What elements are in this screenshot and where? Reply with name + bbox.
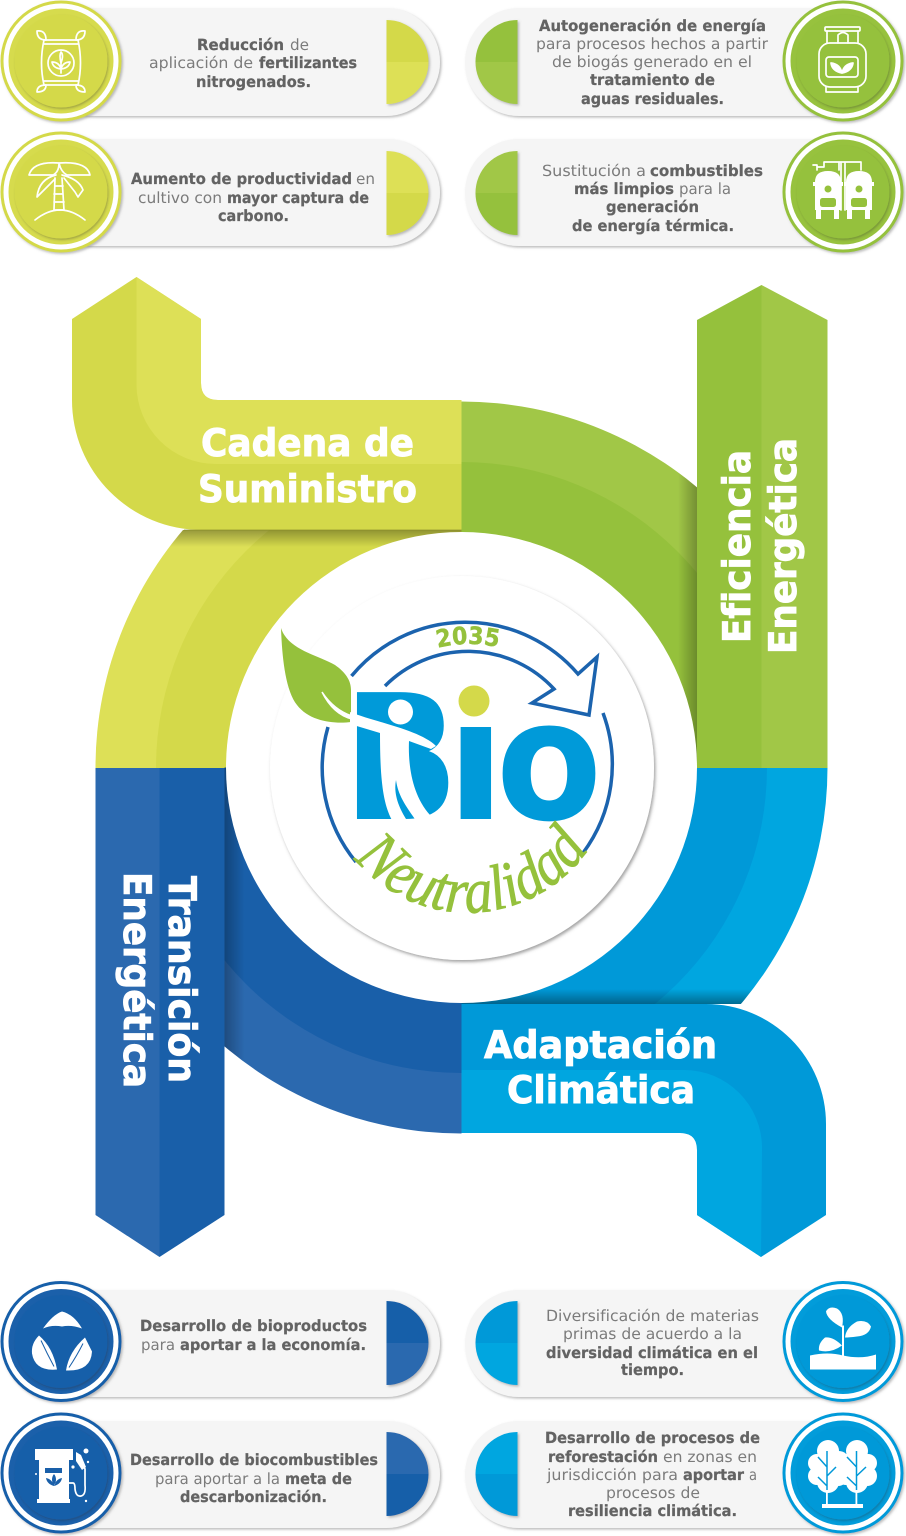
arrow: Eficiencia Energética: [697, 285, 828, 768]
arc segment: climate adaptation quadrant: [462, 768, 828, 1004]
panel: aumento de productividad: [2, 133, 440, 251]
logo: Bio wordmark: B: [343, 658, 459, 861]
badge with leaves icon: [2, 1282, 120, 1400]
logo: leaf: [281, 628, 352, 723]
central white disc: [226, 532, 697, 1003]
text block: Diversificación de materias: [546, 1307, 759, 1325]
text block: Desarrollo de biocombustibles: [130, 1451, 378, 1469]
arrow: Transición Energética: Transición: [160, 876, 204, 1083]
text block: para aportar a la: [155, 1470, 280, 1488]
logo: circular arrow ring: [322, 622, 612, 862]
text block: [542, 162, 763, 235]
badge with palm icon: [2, 133, 120, 251]
icon: fuel pump: [35, 1448, 89, 1503]
panel: desarrollo de biocombustibles: [2, 1414, 440, 1532]
half disc: [386, 1301, 428, 1385]
text block: más limpios: [574, 180, 674, 198]
text block: nitrogenados.: [196, 73, 311, 91]
arrow: Transición Energética: Energética: [115, 872, 159, 1088]
text block: generación: [606, 198, 699, 216]
arrow: Adaptación Climática: Adaptación: [484, 1023, 717, 1067]
text block: resiliencia climática.: [568, 1502, 737, 1520]
text block: cultivo con: [138, 189, 222, 207]
arrow: Eficiencia Energética: Eficiencia: [715, 450, 759, 643]
logo: Bio wordmark: i: [446, 658, 506, 861]
text block: a: [749, 1466, 757, 1484]
text block: fertilizantes: [259, 54, 357, 72]
half disc: [476, 1301, 518, 1385]
icon: three leaves: [32, 1312, 92, 1371]
text block: aplicación de: [149, 54, 253, 72]
text block: [536, 17, 769, 108]
half disc: [476, 20, 518, 104]
badge with boiler icon: [784, 133, 902, 251]
text block: [149, 36, 357, 91]
badge with sprout icon: [784, 1282, 902, 1400]
text block: aportar: [683, 1466, 744, 1484]
arrow: Transición Energética: [96, 768, 224, 1257]
half disc: [386, 1432, 428, 1516]
badge with trees icon: [784, 1414, 902, 1532]
arc segment: energy efficiency quadrant: [462, 402, 697, 765]
logo: Neutralidad script: Neutralidad: [352, 820, 588, 914]
panel: desarrollo de bioproductos: [2, 1282, 440, 1400]
text block: Autogeneración de energía: [539, 17, 766, 35]
half disc: [386, 151, 428, 235]
arrow: Cadena de Suministro: [72, 277, 462, 531]
text block: [546, 1307, 759, 1379]
panel: diversificación de materias primas: [465, 1282, 902, 1400]
panel: sustitución a combustibles: [465, 133, 902, 251]
text block: reforestación: [548, 1448, 658, 1466]
text block: [140, 1317, 367, 1354]
badge with sack icon: [2, 2, 120, 120]
text block: descarbonización.: [180, 1488, 327, 1506]
logo: Bio wordmark: o: [496, 665, 602, 859]
panel: autogeneración de energía: [465, 2, 902, 120]
text block: Reducción: [197, 36, 284, 54]
text block: para procesos hechos a partir: [536, 35, 769, 53]
half disc: [386, 20, 428, 104]
icon: fertilizer sack: [37, 31, 85, 92]
arc segment: supply chain quadrant: [96, 530, 462, 768]
text block: aguas residuales.: [581, 90, 724, 108]
text block: Sustitución a: [542, 162, 646, 180]
text block: Desarrollo de bioproductos: [140, 1317, 367, 1335]
text block: de biogás generado en el: [552, 53, 752, 71]
half disc: [476, 1432, 518, 1516]
text block: [131, 170, 375, 225]
icon: twin boilers: [813, 162, 874, 219]
icon: palm tree: [29, 163, 90, 220]
arrow: Adaptación Climática: [462, 1004, 826, 1257]
text block: mayor captura de: [227, 189, 369, 207]
text block: aportar a la economía.: [180, 1336, 366, 1354]
text block: para la: [679, 180, 731, 198]
panel: reducción de fertilizantes: [2, 2, 440, 120]
arrow: Eficiencia Energética: Energética: [761, 438, 805, 654]
text block: carbono.: [218, 207, 289, 225]
icon: trees: [808, 1440, 877, 1508]
text block: Desarrollo de procesos de: [545, 1429, 760, 1447]
arc segment: energy transition quadrant: [224, 768, 462, 1134]
text block: de energía térmica.: [572, 217, 734, 235]
text block: meta de: [285, 1470, 352, 1488]
text block: tratamiento de: [590, 71, 715, 89]
text block: primas de acuerdo a la: [563, 1325, 742, 1343]
icon: biogas cylinder: [819, 27, 866, 92]
text block: [130, 1451, 378, 1506]
text block: de: [290, 36, 309, 54]
text block: jurisdicción para: [546, 1466, 678, 1484]
logo: 2035: 2035: [436, 626, 499, 648]
text block: diversidad climática en el: [546, 1344, 758, 1362]
text block: combustibles: [650, 162, 763, 180]
badge with gas tank icon: [784, 2, 902, 120]
text block: tiempo.: [621, 1361, 684, 1379]
arrow: Cadena de Suministro: Cadena de: [201, 421, 414, 465]
badge with fuel pump icon: [2, 1414, 120, 1532]
logo: Bio wordmark: [350, 686, 596, 822]
text block: procesos de: [606, 1484, 700, 1502]
logo: Bio Neutralidad 2035: [270, 576, 658, 964]
half disc: [476, 151, 518, 235]
arrow: Cadena de Suministro: Suministro: [198, 467, 417, 511]
text block: para: [141, 1336, 175, 1354]
icon: sprout: [810, 1308, 876, 1370]
arrow: Adaptación Climática: Climática: [507, 1068, 695, 1112]
text block: en: [356, 170, 375, 188]
panel: procesos de reforestación: [465, 1414, 902, 1532]
text block: en zonas en: [663, 1448, 757, 1466]
text block: Aumento de productividad: [131, 170, 352, 188]
text block: [545, 1429, 760, 1520]
